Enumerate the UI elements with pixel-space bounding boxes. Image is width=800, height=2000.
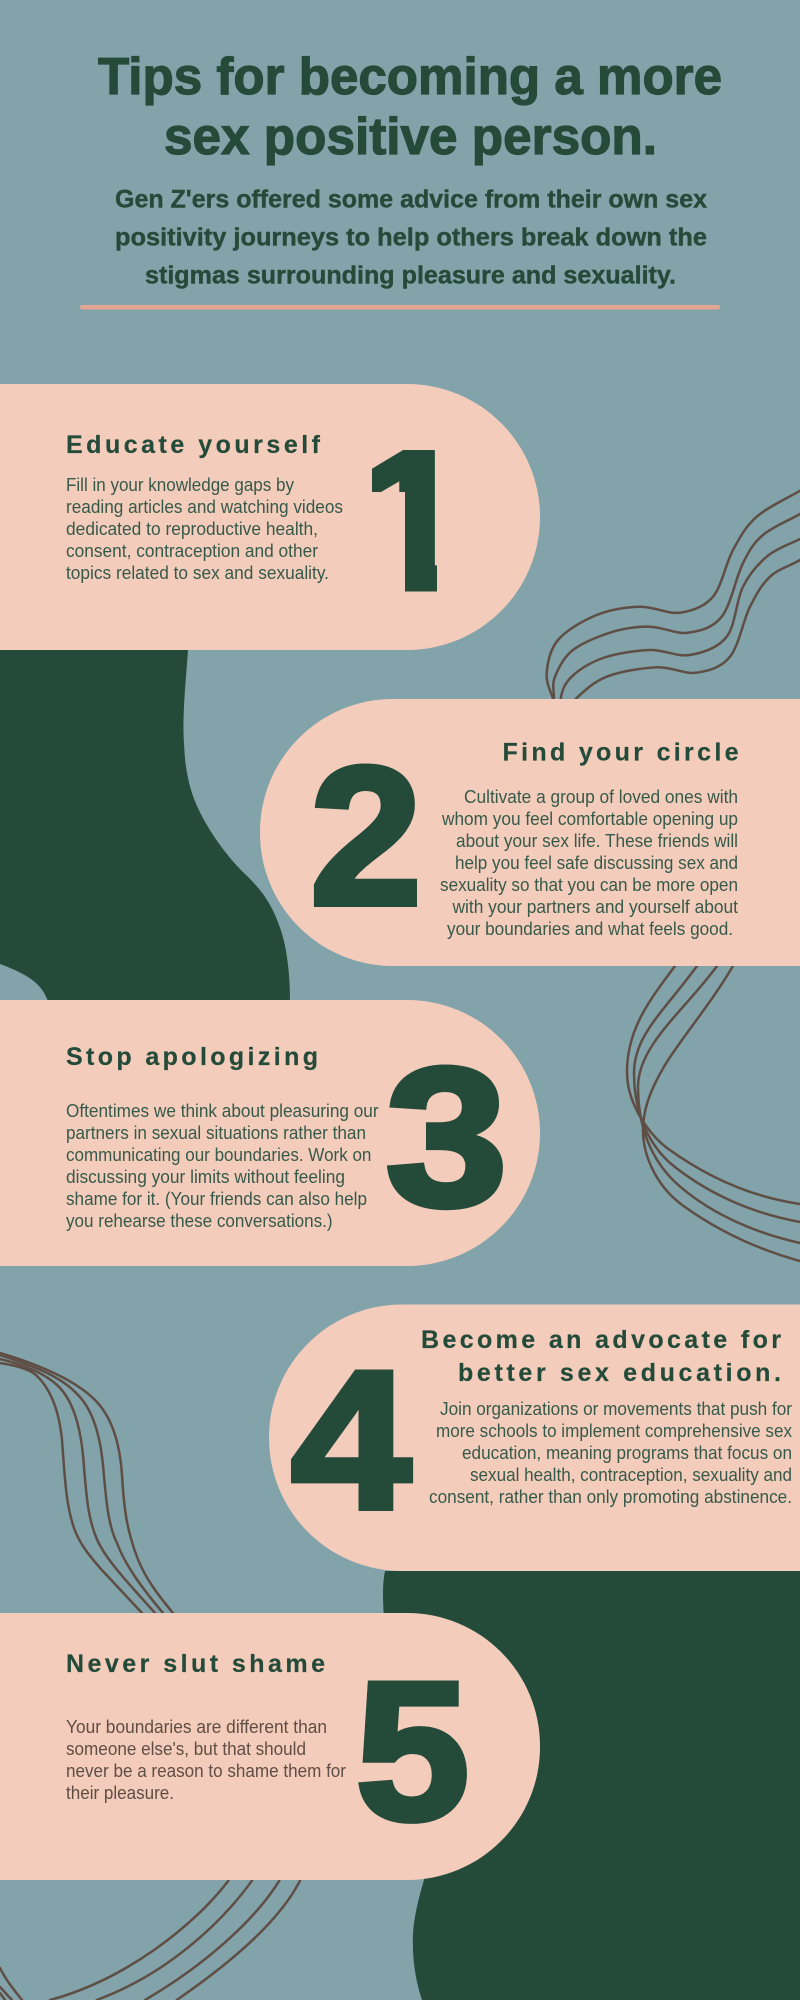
pill 5: [0, 1613, 540, 1880]
dark green blob: upper left: [0, 650, 290, 1000]
body 5: never be a reason to shame them for: [66, 1761, 346, 1781]
number 1: 1: [353, 410, 471, 630]
body 1: reading articles and watching videos: [66, 497, 343, 517]
heading 3: Stop apologizing: [66, 1043, 318, 1071]
number 3: 3: [386, 1027, 508, 1247]
body 5: their pleasure.: [66, 1783, 174, 1803]
body 4: more schools to implement comprehensive sex: [436, 1421, 792, 1441]
subtitle: stigmas surrounding pleasure and sexuality.: [145, 262, 676, 290]
pill 4: [269, 1304, 800, 1571]
wave lines: bottom left: [0, 1881, 300, 2000]
heading 1: Educate yourself: [66, 431, 321, 459]
body 2: with your partners and yourself about: [452, 897, 738, 917]
panel: tip 3: [0, 1000, 540, 1266]
wave lines: left middle: [0, 1353, 173, 1613]
heading 4: better sex education.: [458, 1359, 781, 1387]
body 3: discussing your limits without feeling: [66, 1167, 345, 1187]
body 2: Cultivate a group of loved ones with: [464, 787, 738, 807]
pill 3: [0, 1000, 540, 1266]
body 4: education, meaning programs that focus on: [462, 1443, 792, 1463]
body 1: [66, 475, 343, 583]
body 2: [440, 787, 738, 939]
body 4: consent, rather than only promoting abstinence.: [429, 1487, 792, 1507]
pill 2: [260, 699, 800, 966]
title: Tips for becoming a more: [98, 48, 722, 106]
heading 2: Find your circle: [502, 738, 739, 766]
title: sex positive person.: [164, 108, 657, 166]
subtitle: Gen Z'ers offered some advice from their own sex: [115, 186, 707, 214]
number 2: 2: [310, 726, 422, 946]
panel: tip 4: [269, 1304, 800, 1571]
panel: tip 2: [260, 699, 800, 966]
body 1: dedicated to reproductive health,: [66, 519, 318, 539]
body 3: you rehearse these conversations.): [66, 1211, 333, 1231]
body 4: sexual health, contraception, sexuality and: [470, 1465, 792, 1485]
pill 1: [0, 384, 540, 650]
body 1: Fill in your knowledge gaps by: [66, 475, 294, 495]
subtitle: positivity journeys to help others break down the: [115, 224, 707, 252]
heading 4: [421, 1326, 781, 1387]
body 5: [66, 1717, 346, 1803]
body 3: Oftentimes we think about pleasuring our: [66, 1101, 379, 1121]
body 2: your boundaries and what feels good.: [447, 919, 733, 939]
dark green blob: lower right: [383, 1571, 800, 2000]
body 2: sexuality so that you can be more open: [440, 875, 738, 895]
divider rule: [80, 305, 720, 310]
body 3: [66, 1101, 379, 1231]
wave lines: right middle: [627, 966, 800, 1261]
number 4: 4: [291, 1330, 411, 1550]
body 4: Join organizations or movements that push for: [440, 1399, 792, 1419]
body 3: partners in sexual situations rather than: [66, 1123, 366, 1143]
body 1: topics related to sex and sexuality.: [66, 563, 329, 583]
wave lines: upper right: [547, 491, 800, 699]
body 3: shame for it. (Your friends can also help: [66, 1189, 367, 1209]
heading 5: Never slut shame: [66, 1650, 325, 1678]
body 2: help you feel safe discussing sex and: [455, 853, 738, 873]
body 5: someone else's, but that should: [66, 1739, 306, 1759]
panel: tip 1: [0, 384, 540, 650]
heading 4: Become an advocate for: [421, 1326, 781, 1354]
body 5: Your boundaries are different than: [66, 1717, 327, 1737]
panel: tip 5: [0, 1613, 540, 1880]
body 3: communicating our boundaries. Work on: [66, 1145, 371, 1165]
number 5: 5: [356, 1641, 470, 1861]
body 2: whom you feel comfortable opening up: [441, 809, 738, 829]
subtitle: [115, 186, 707, 290]
body 1: consent, contraception and other: [66, 541, 318, 561]
body 2: about your sex life. These friends will: [456, 831, 738, 851]
body 4: [429, 1399, 792, 1507]
title: [98, 48, 722, 166]
